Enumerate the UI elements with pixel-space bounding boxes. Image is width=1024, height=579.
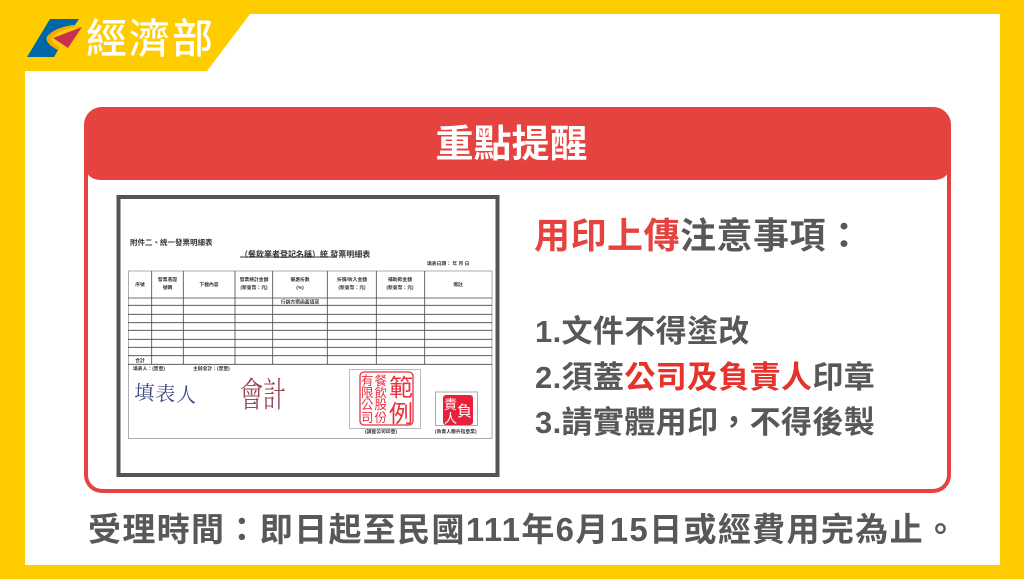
form column headers: 發票憑證 (158, 276, 177, 283)
form title: （餐飲業者登記名稱）統 發票明細表 (240, 249, 370, 259)
form column headers: (%) (296, 285, 304, 291)
form column headers: 行銷方案函蓋填寫 (281, 298, 319, 306)
form frame (118, 197, 498, 475)
form column headers: (新臺幣：元) (386, 284, 414, 291)
form column headers: (新臺幣：元) (240, 284, 268, 291)
form signature labels: (請蓋公司印章) (365, 428, 397, 435)
form signature labels (133, 365, 477, 435)
form column headers: 發票總計金額 (240, 276, 269, 283)
form signature labels: 填表人：(簽章) (133, 365, 165, 372)
company seal: 份 (374, 411, 387, 425)
signature: preparer: 填表人 (134, 381, 198, 407)
form column headers: 序號 (135, 281, 145, 288)
responsible person seal (436, 392, 478, 426)
company seal: 股 (374, 398, 387, 412)
signature: accountant: 會計 (240, 376, 286, 415)
company seal (350, 370, 420, 428)
company seal: 飲 (374, 385, 387, 400)
panel heading: 重點提醒 (435, 124, 588, 166)
logo: ministry emblem (27, 19, 82, 57)
logo title: 經濟部 (86, 16, 215, 62)
panel: key reminder (84, 107, 951, 493)
form column headers: 補助款金額 (388, 276, 412, 283)
footer: application period: 受理時間：即日起至民國111年6月15日或經費用完為止。 (88, 511, 958, 548)
note 2: 2.須蓋公司及負責人印章 (535, 360, 875, 394)
responsible person seal: 責 (444, 397, 457, 412)
note 3: 3.請實體用印，不得後製 (535, 405, 875, 440)
company seal: 餐 (374, 373, 388, 388)
panel heading bar (84, 107, 951, 180)
form column headers: 下載內容 (199, 281, 219, 288)
form signature labels: (負責人親兵指章業) (435, 428, 477, 435)
form column headers: 合計 (135, 357, 145, 364)
list of notes (535, 314, 875, 440)
company seal: 公 (361, 398, 374, 412)
form column headers: 優惠折數 (290, 276, 310, 283)
company seal: 範 (389, 375, 413, 402)
company seal: 有 (361, 374, 374, 388)
form example (116, 195, 500, 477)
note 1: 1.文件不得塗改 (535, 314, 750, 349)
form title (130, 237, 470, 267)
heading: stamp upload notes: 用印上傳注意事項： (534, 215, 863, 256)
company seal: 司 (361, 411, 374, 425)
form signature labels: 主辦會計：(簽章) (193, 365, 230, 372)
form table (128, 271, 492, 438)
form title: 附件二、統一發票明細表 (130, 237, 213, 247)
form column headers: (新臺幣：元) (338, 284, 366, 291)
form column headers: 折價/收入金額 (337, 276, 367, 283)
form column headers: 號碼 (163, 284, 172, 291)
form title: 填表日期： 年 月 日 (427, 260, 470, 267)
company seal: 限 (361, 386, 374, 400)
responsible person seal: 負 (457, 403, 472, 420)
company seal: 例 (389, 401, 413, 428)
form column headers: 備註 (453, 281, 463, 288)
form column headers (135, 276, 463, 364)
responsible person seal: 人 (444, 411, 457, 426)
